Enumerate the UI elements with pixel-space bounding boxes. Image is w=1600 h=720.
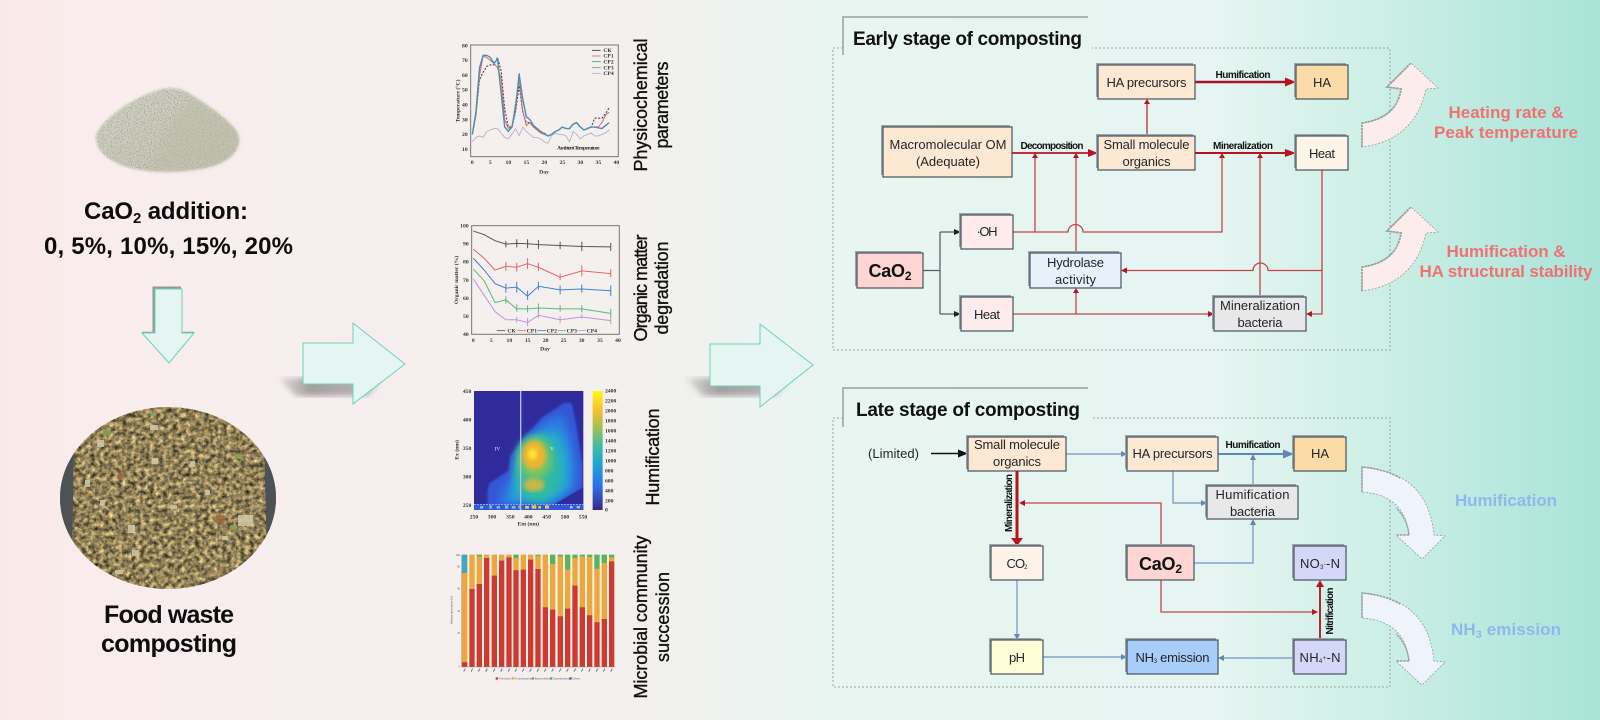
box: CaO2 late: CaO (1139, 554, 1176, 574)
heading: late stage frame and title (843, 388, 1088, 427)
box: Small molecule organics: organics (1122, 154, 1171, 169)
chart: temperature line chart: 15 (523, 160, 529, 166)
text: NH3 emission outcome: 3 (1476, 629, 1482, 641)
label: Microbial community succession: Microbial community (631, 536, 651, 698)
chart: organic matter line chart: 5 (490, 338, 493, 344)
heading: CaO2 addition: CaO (84, 198, 133, 225)
box: Macromolecular OM: Macromolecular OM (890, 137, 1006, 152)
chart: organic matter line chart (453, 224, 621, 353)
chart: EEM fluorescence heatmap: 250 (470, 514, 478, 520)
label: Physicochemical parameters: parameters (652, 62, 672, 148)
box: Small molecule organics late (966, 435, 1066, 471)
chart: organic matter line chart: 20 (543, 338, 549, 344)
label: Microbial community succession (631, 536, 673, 698)
arrow: to analysis (278, 323, 405, 404)
chart: EEM fluorescence heatmap: 1000 (605, 458, 616, 464)
chart: temperature line chart: 35 (595, 160, 601, 166)
icon: down curved arrow NH3 (1362, 593, 1445, 685)
chart: temperature line chart: 40 (462, 103, 468, 109)
box: HA precursors late: HA precursors (1132, 446, 1213, 461)
box: Hydrolase activity: Hydrolase (1047, 255, 1104, 270)
box: NH4-N: 4 (1319, 659, 1323, 665)
heading: early stage frame and title: Early stage of composting (853, 29, 1082, 50)
box: pH: pH (1009, 650, 1025, 665)
chart: temperature line chart: 60 (462, 73, 468, 79)
heading: late stage frame and title: Late stage of composting (856, 400, 1080, 421)
box: NO3-N: 3 (1320, 565, 1324, 571)
chart: microbial community stacked bars: 0 (459, 667, 461, 669)
chart: EEM fluorescence heatmap: 2400 (605, 389, 616, 395)
box: NH4-N: NH (1300, 650, 1319, 665)
chart: temperature line chart: CP4 (603, 71, 614, 77)
text: Humification and HA structural stability: HA structural stability (1420, 262, 1593, 281)
chart: microbial community stacked bars: Bacteroidetes (535, 677, 552, 681)
label: Organic matter degradation (631, 234, 672, 342)
chart: EEM fluorescence heatmap: 250 (463, 503, 472, 509)
chart: EEM fluorescence heatmap: 500 (561, 514, 569, 520)
text: NH3 emission outcome: emission (1482, 620, 1561, 639)
box: NH3 emission: emission (1157, 650, 1210, 665)
label: Organic matter degradation: degradation (652, 242, 672, 334)
box: CaO2 early (855, 251, 923, 288)
box: Heat output: Heat (1309, 146, 1335, 161)
panel: analysis charts (450, 38, 673, 698)
chart: microbial community stacked bars: 60 (457, 589, 461, 591)
chart: organic matter line chart: 15 (525, 338, 531, 344)
chart: organic matter line chart: 0 (472, 338, 475, 344)
chart: EEM fluorescence heatmap: 200 (605, 498, 614, 504)
box: CO2: 2 (1024, 565, 1028, 571)
box: NH3 emission (1125, 638, 1218, 674)
chart: microbial community stacked bars: Cyanobacteria (553, 677, 571, 681)
box: Heat (959, 295, 1013, 331)
chart: organic matter line chart: 25 (561, 338, 567, 344)
text: Heating rate and peak temperature: Heating rate & (1448, 103, 1564, 122)
label: Mineralization: Mineralization (1213, 141, 1273, 152)
chart: microbial community stacked bars: Proteobacteria (515, 677, 532, 681)
chart: temperature line chart: CK (603, 48, 612, 54)
chart: temperature line chart: 30 (577, 160, 583, 166)
box: NO3-N: - (1324, 562, 1326, 568)
box: NO3-N (1292, 544, 1346, 580)
chart: temperature line chart: CP2 (603, 59, 614, 65)
chart: EEM fluorescence heatmap: 450 (463, 389, 472, 395)
chart: EEM fluorescence heatmap: IV (494, 446, 501, 452)
box: Mineralization bacteria (1212, 295, 1306, 331)
box: NO3-N: NO (1300, 556, 1320, 571)
chart: organic matter line chart: 100 (460, 224, 469, 230)
box: Hydrolase activity (1028, 251, 1121, 288)
chart: organic matter line chart: 60 (463, 296, 469, 302)
heading: CaO2 addition: addition: (141, 198, 248, 225)
chart: organic matter line chart: Day (540, 347, 550, 353)
chart: microbial community stacked bars: 80 (457, 566, 461, 568)
chart: organic matter line chart: 30 (579, 338, 585, 344)
icon: CaO2 powder pile (96, 88, 239, 172)
label: Physicochemical parameters: Physicochemical (631, 38, 651, 172)
chart: EEM fluorescence heatmap: 400 (463, 418, 472, 424)
box: HA precursors: HA precursors (1106, 75, 1187, 90)
chart: temperature line chart: 0 (471, 160, 474, 166)
chart: organic matter line chart: Organic matter (%) (453, 256, 460, 304)
chart: EEM fluorescence heatmap: 350 (463, 446, 472, 452)
chart: microbial community stacked bars: Others (572, 677, 581, 681)
chart: organic matter line chart: 80 (463, 260, 469, 266)
text: NH3 emission outcome: NH (1451, 620, 1476, 639)
box: HA: HA (1313, 75, 1331, 90)
panel: composting input (44, 88, 293, 658)
chart: temperature line chart: Temperature (°C) (454, 79, 461, 122)
chart: temperature line chart: Ambient Temperature (557, 145, 600, 151)
chart: temperature line chart: CP1 (603, 54, 614, 60)
panel: late stage of composting (833, 388, 1390, 687)
chart: EEM fluorescence heatmap: 450 (542, 514, 551, 520)
chart: temperature line chart: 80 (462, 43, 468, 49)
chart: organic matter line chart: 10 (506, 338, 512, 344)
label: Humification late: Humification (1226, 440, 1280, 451)
heading: CaO2 addition: 0, 5%, 10%, 15%, 20% (44, 233, 293, 260)
chart: temperature line chart (454, 43, 619, 175)
chart: organic matter line chart: 35 (597, 338, 603, 344)
chart: EEM fluorescence heatmap: 1400 (605, 439, 616, 445)
box: Macromolecular OM (881, 125, 1012, 177)
label: Limited: (Limited) (868, 446, 919, 461)
text: Heating rate and peak temperature: Peak temperature (1434, 123, 1578, 142)
box: NH4-N: -N (1326, 650, 1340, 665)
box: HA late (1292, 435, 1346, 471)
chart: EEM fluorescence heatmap: 600 (605, 478, 614, 484)
box: NH3 emission: 3 (1154, 659, 1158, 665)
chart: EEM fluorescence heatmap: 2200 (605, 399, 616, 405)
chart: microbial community stacked bars: 20 (457, 633, 461, 635)
chart: EEM fluorescence heatmap: 400 (605, 488, 614, 494)
icon: up curved arrow humification (1362, 207, 1438, 291)
panel: outcomes (1362, 63, 1593, 685)
chart: temperature line chart: 20 (541, 160, 547, 166)
chart: temperature line chart: 30 (462, 117, 468, 123)
chart: EEM fluorescence heatmap: 400 (524, 514, 533, 520)
chart: temperature line chart: CP3 (603, 65, 614, 71)
heading: Food waste composting: composting (101, 630, 237, 658)
box: CaO2 early: 2 (905, 269, 912, 283)
box: Humification bacteria: bacteria (1230, 504, 1276, 519)
chart: microbial community stacked bars: 100 (456, 555, 461, 557)
chart: EEM fluorescence heatmap: Em (nm) (518, 521, 539, 528)
chart: organic matter line chart: CP4 (587, 328, 597, 334)
heading: CaO2 addition (44, 198, 293, 260)
chart: EEM fluorescence heatmap: 1800 (605, 419, 616, 425)
box: Mineralization bacteria: Mineralization (1220, 298, 1300, 313)
text: Humification and HA structural stability (1420, 242, 1593, 281)
box: Macromolecular OM: (Adequate) (916, 154, 980, 169)
arrows: late stage network (931, 450, 1324, 661)
label: Humification: Humification (1216, 70, 1270, 81)
chart: organic matter line chart: 70 (463, 278, 469, 284)
chart: organic matter line chart: 90 (463, 242, 469, 248)
box: NH4-N: + (1323, 656, 1327, 662)
box: pH (989, 638, 1043, 674)
chart: microbial community stacked bars (450, 555, 615, 681)
box: Mineralization bacteria: bacteria (1238, 315, 1283, 330)
chart: organic matter line chart: CP3 (567, 328, 577, 334)
heading: Food waste composting: Food waste (104, 601, 234, 629)
arrow: down (142, 288, 194, 363)
box: HA precursors (1096, 63, 1195, 99)
heading: early stage frame and title (843, 17, 1088, 55)
chart: temperature line chart: 25 (559, 160, 565, 166)
label: Humification: Humification (643, 408, 663, 506)
chart: EEM fluorescence heatmap: 300 (463, 474, 472, 480)
photo: food waste compost (60, 407, 276, 590)
box: Heat: Heat (974, 307, 1000, 322)
chart: EEM fluorescence heatmap (454, 389, 616, 528)
chart: EEM fluorescence heatmap: 550 (579, 514, 587, 520)
heading: Food waste composting (101, 601, 237, 658)
chart: EEM fluorescence heatmap: 1200 (605, 448, 616, 454)
chart: organic matter line chart: 50 (463, 314, 469, 320)
chart: temperature line chart: 20 (462, 132, 468, 138)
label: Microbial community succession: succession (653, 572, 673, 662)
chart: organic matter line chart: CP1 (527, 328, 537, 334)
chart: temperature line chart: 5 (489, 160, 492, 166)
box: CaO2 late (1125, 544, 1194, 580)
box: Heat output (1294, 134, 1348, 170)
text: Heating rate and peak temperature (1434, 103, 1578, 142)
box: Small molecule organics (1096, 134, 1195, 170)
box: NH3 emission: NH (1136, 650, 1154, 665)
arrow: to mechanism (685, 324, 813, 407)
arrows: early stage network (923, 78, 1322, 317)
chart: temperature line chart: 70 (462, 58, 468, 64)
heading: CaO2 addition: 2 (133, 210, 141, 227)
chart: organic matter line chart: CK (507, 328, 516, 334)
label: Nitrification vertical: Nitrification (1325, 588, 1336, 634)
chart: temperature line chart: 10 (505, 160, 511, 166)
text: Humification outcome: Humification (1455, 491, 1557, 510)
box: NO3-N: -N (1326, 556, 1340, 571)
box: CO2: CO (1006, 556, 1025, 571)
chart: EEM fluorescence heatmap: V (550, 446, 555, 452)
box: Small molecule organics late: organics (993, 454, 1042, 469)
chart: organic matter line chart: 40 (615, 338, 621, 344)
box: Hydrolase activity: activity (1055, 272, 1096, 287)
box: HA (1294, 63, 1348, 99)
label: Organic matter degradation: Organic matter (631, 234, 651, 342)
label: Mineralization vertical: Mineralization (1004, 474, 1015, 532)
box: CaO2 late: 2 (1175, 562, 1182, 576)
icon: up curved arrow heating (1362, 63, 1438, 147)
chart: microbial community stacked bars: Firmicutes (499, 677, 512, 681)
label: Physicochemical parameters (631, 38, 672, 172)
chart: microbial community stacked bars: 40 (457, 611, 461, 613)
box: NH4-N (1292, 638, 1346, 674)
box: OH radical (959, 213, 1013, 249)
text: Humification and HA structural stability: Humification & (1446, 242, 1566, 261)
chart: EEM fluorescence heatmap: 350 (506, 514, 515, 520)
chart: temperature line chart: 40 (613, 160, 619, 166)
box: Small molecule organics: Small molecule (1104, 137, 1190, 152)
box: HA late: HA (1311, 446, 1329, 461)
box: Small molecule organics late: Small molecule (974, 437, 1060, 452)
box: CaO2 early: CaO (868, 261, 905, 281)
box: OH radical: ·OH (976, 224, 998, 239)
chart: EEM fluorescence heatmap: 1600 (605, 429, 616, 435)
box: HA precursors late (1125, 435, 1218, 471)
chart: temperature line chart: Day (539, 169, 549, 175)
chart: microbial community stacked bars: Relative abundance (%) (450, 596, 454, 624)
chart: organic matter line chart: 40 (463, 332, 469, 338)
box: Humification bacteria: Humification (1216, 487, 1290, 502)
icon: down curved arrow humification (1362, 467, 1445, 559)
box: CO2 (989, 544, 1043, 580)
chart: EEM fluorescence heatmap: 300 (488, 514, 496, 520)
chart: EEM fluorescence heatmap: 2000 (605, 409, 616, 415)
chart: temperature line chart: 10 (462, 147, 468, 153)
chart: EEM fluorescence heatmap: 0 (605, 508, 608, 514)
chart: EEM fluorescence heatmap: Ex (nm) (454, 440, 461, 460)
box: Humification bacteria (1205, 484, 1298, 519)
panel: early stage of composting (833, 17, 1390, 350)
label: Decomposition: Decomposition (1020, 141, 1084, 152)
chart: EEM fluorescence heatmap: 800 (605, 468, 614, 474)
chart: organic matter line chart: CP2 (547, 328, 557, 334)
chart: temperature line chart: 50 (462, 88, 468, 94)
